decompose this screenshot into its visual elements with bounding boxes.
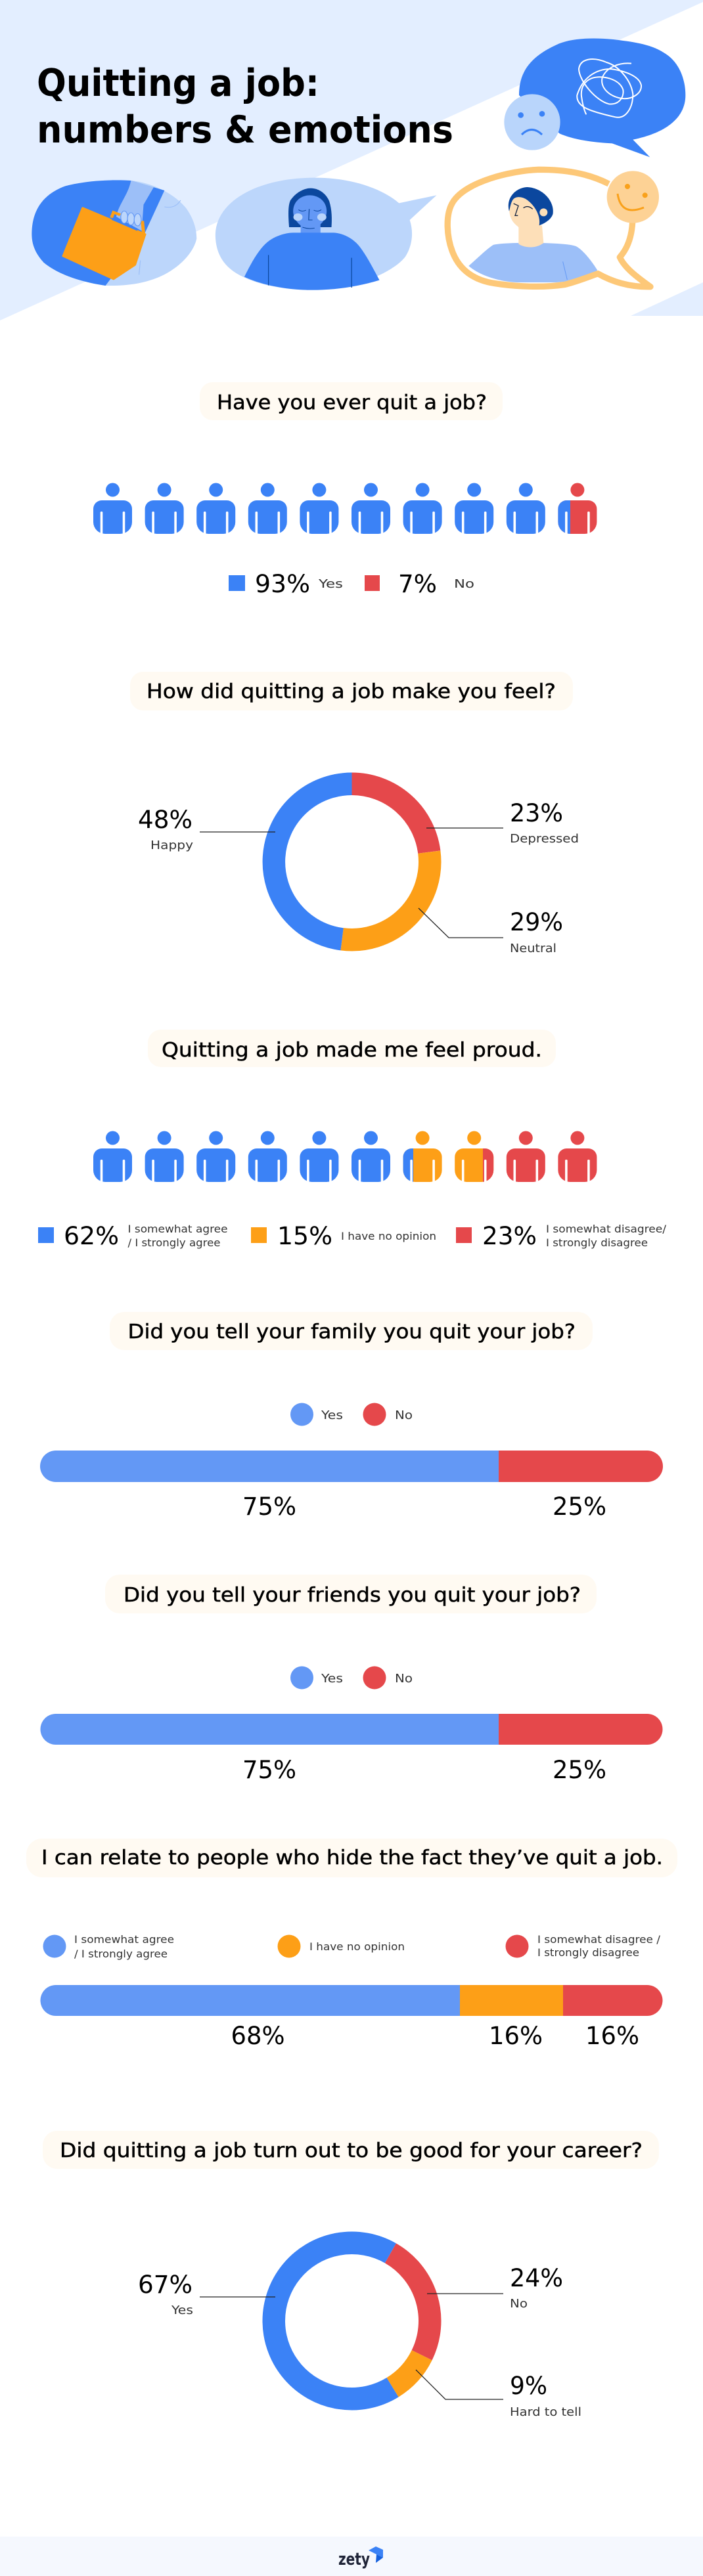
callout: depressed: 23%	[510, 799, 563, 827]
heading	[200, 382, 503, 420]
legend: No	[454, 577, 474, 591]
title: Quitting a job:	[37, 62, 319, 105]
heading: Did you tell your family you quit your job?	[127, 1321, 576, 1343]
legend: No	[395, 1408, 413, 1422]
callout: hard to tell: 9%	[510, 2372, 547, 2400]
legend: 93%	[255, 570, 310, 598]
callout: neutral: Neutral	[510, 942, 556, 955]
section: tell your friends	[40, 1575, 662, 1784]
legend	[38, 1222, 667, 1250]
callout: happy: 48%	[138, 806, 193, 834]
legend: I somewhat agree	[74, 1933, 174, 1946]
legend: No	[395, 1672, 413, 1686]
heading: How did quitting a job make you feel?	[147, 680, 556, 703]
illustration: man in orange speech bubble with happy face	[447, 169, 659, 287]
legend	[229, 570, 474, 598]
donut chart	[274, 2243, 430, 2399]
callout: neutral	[419, 908, 563, 955]
heading: Have you ever quit a job?	[217, 391, 487, 414]
callout: depressed: Depressed	[510, 832, 579, 846]
heading	[43, 2131, 659, 2169]
heading: Did quitting a job turn out to be good for your career?	[60, 2139, 643, 2162]
callout: neutral: 29%	[510, 908, 563, 936]
title	[37, 62, 453, 152]
legend: I somewhat disagree/	[546, 1223, 667, 1235]
legend: I have no opinion	[309, 1940, 405, 1953]
stacked bar: 75%	[242, 1756, 296, 1784]
callout: happy: Happy	[150, 839, 193, 852]
illustration: woman in speech bubble	[215, 178, 436, 290]
stacked bar: 68%	[231, 2022, 285, 2050]
stacked bar: 25%	[553, 1756, 606, 1784]
stacked bar	[40, 1985, 662, 2050]
stacked bar: 16%	[585, 2022, 639, 2050]
legend: I somewhat disagree /	[537, 1933, 661, 1946]
callout: no: 24%	[510, 2264, 563, 2292]
legend: / I strongly agree	[127, 1236, 221, 1249]
stacked bar: 25%	[553, 1493, 606, 1521]
stacked bar: 75%	[242, 1493, 296, 1521]
stacked bar	[40, 1451, 663, 1521]
callout: yes	[138, 2271, 275, 2317]
section: good for your career	[43, 2131, 659, 2419]
heading: Quitting a job made me feel proud.	[162, 1039, 542, 1062]
legend: I somewhat agree	[127, 1223, 227, 1235]
callout: no: No	[510, 2297, 528, 2311]
stacked bar	[40, 1714, 662, 1784]
heading	[130, 672, 573, 710]
heading	[110, 1312, 593, 1350]
callout: hard to tell: Hard to tell	[510, 2405, 581, 2419]
heading	[148, 1030, 556, 1067]
pictogram: 10 people	[93, 1131, 597, 1183]
section: tell your family	[40, 1312, 663, 1521]
legend: Yes	[318, 577, 343, 591]
title: numbers & emotions	[37, 108, 453, 152]
heading	[26, 1839, 677, 1877]
heading	[105, 1575, 597, 1613]
legend: 15%	[277, 1222, 332, 1250]
section: relate to people who hide it	[26, 1839, 677, 2050]
heading: I can relate to people who hide the fact they’ve quit a job.	[41, 1846, 663, 1869]
heading: Did you tell your friends you quit your job?	[124, 1584, 581, 1607]
legend: / I strongly agree	[74, 1948, 168, 1960]
section: how did quitting make you feel	[130, 672, 579, 955]
callout: no	[427, 2264, 563, 2311]
legend: Yes	[321, 1672, 343, 1686]
legend: 62%	[64, 1222, 119, 1250]
footer	[0, 2537, 703, 2576]
callout: yes: Yes	[171, 2303, 193, 2317]
legend	[290, 1403, 413, 1426]
header background	[0, 0, 703, 320]
callout: yes: 67%	[138, 2271, 193, 2299]
legend: 7%	[398, 570, 437, 598]
legend: I have no opinion	[341, 1230, 436, 1242]
legend	[43, 1933, 661, 1960]
stacked bar: 16%	[489, 2022, 543, 2050]
callout: hard to tell	[416, 2370, 581, 2419]
illustration: worried speech bubble with sad face	[504, 38, 685, 157]
pictogram: 10 people	[93, 483, 597, 535]
logo: zety: zety	[338, 2550, 370, 2569]
section: quitting made me feel proud	[38, 1030, 667, 1250]
legend: I strongly disagree	[546, 1236, 648, 1249]
legend: I strongly disagree	[537, 1946, 639, 1959]
legend	[290, 1667, 413, 1689]
illustration: hand holding a bag	[32, 180, 196, 286]
donut chart	[274, 784, 430, 940]
callout: depressed	[426, 799, 579, 846]
callout: happy	[138, 806, 275, 852]
legend: Yes	[321, 1408, 343, 1422]
section: have you ever quit a job	[93, 382, 597, 598]
legend: 23%	[482, 1222, 537, 1250]
